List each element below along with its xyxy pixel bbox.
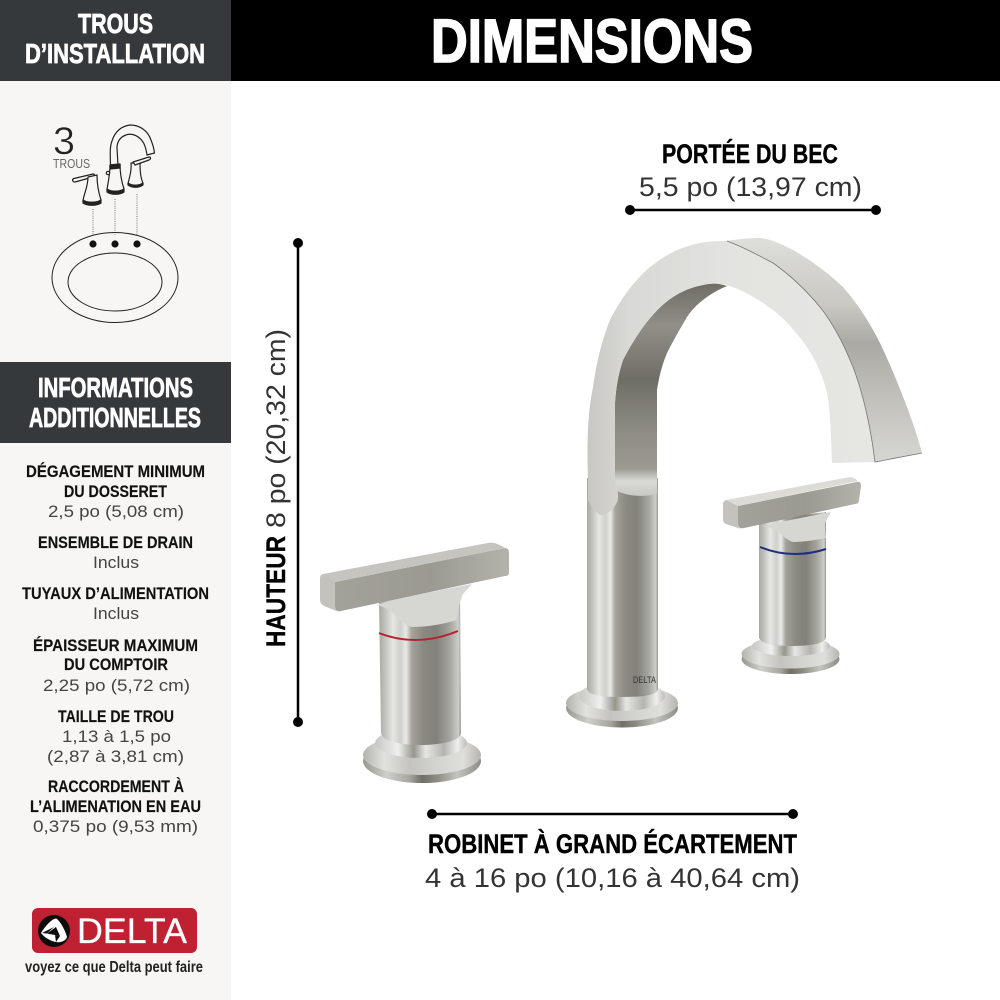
handle neck [377,584,472,627]
header: informations additionnelles: ADDITIONNELLES [29,402,201,433]
spec: dégagement minimum: DÉGAGEMENT MINIMUM [26,462,205,481]
spout inside [615,284,727,496]
dimension: height: HAUTEUR [261,536,291,647]
lever top highlight [323,543,505,582]
header: informations additionnelles [0,362,231,443]
spec: épaisseur maximum: 2,25 po (5,72 cm) [43,677,190,695]
label: 3 trous: 3 [53,120,75,163]
lever bar [738,482,861,528]
spout front face [588,241,875,515]
label: 3 trous [53,120,90,171]
handle stem [759,512,826,646]
spec: taille de trou: 1,13 à 1,5 po [62,728,171,746]
spec: raccordement [30,777,201,836]
spec: dégagement minimum: DU DOSSERET [64,483,167,501]
dimension: spout reach [625,138,881,215]
label: 3 trous: TROUS [53,157,90,171]
handle stem [379,590,461,745]
spec: épaisseur maximum [33,636,198,695]
spec: épaisseur maximum: ÉPAISSEUR MAXIMUM [33,636,198,655]
header: informations additionnelles: INFORMATIONS [38,372,193,403]
hole alignment dotted lines [93,194,137,235]
red indicator line [379,631,458,640]
spec: ensemble de drain [38,534,193,572]
lever end cap [320,574,339,612]
spec: taille de trou: (2,87 à 3,81 cm) [47,748,184,766]
header: dimensions [231,0,1000,81]
lever top highlight [726,477,858,506]
header: trous d'installation: TROUS [78,8,153,39]
spec: ensemble de drain: ENSEMBLE DE DRAIN [38,534,193,552]
icon: three-hole sink diagram [52,120,178,322]
handle base [742,636,840,674]
engraved delta mark: DELTA [633,675,657,686]
header: dimensions: DIMENSIONS [431,7,753,75]
faucet: right handle (cold) [723,477,861,674]
faucet: centre spout [566,238,922,728]
spout pillar [587,478,658,697]
spec: tuyaux d'alimentation [22,585,209,623]
sink basin [52,232,178,322]
spec: épaisseur maximum: DU COMPTOIR [64,656,168,674]
spec: taille de trou: TAILLE DE TROU [58,708,174,726]
spec: tuyaux d'alimentation: Inclus [93,605,139,623]
logo: delta: voyez ce que Delta peut faire [25,959,203,976]
logo: delta [25,908,203,976]
header: trous d'installation: D’INSTALLATION [25,38,205,69]
sidebar background [0,0,231,1000]
spec: raccordement: L’ALIMENATION EN EAU [30,798,201,816]
dimension: widespread [425,809,800,893]
dimension: height: 8 po (20,32 cm) [261,329,291,528]
spec: raccordement: 0,375 po (9,53 mm) [33,818,198,836]
dimension: widespread: ROBINET À GRAND ÉCARTEMENT [428,828,797,859]
dimension: height [261,238,303,727]
dimension: widespread: 4 à 16 po (10,16 à 40,64 cm) [425,863,800,893]
spout edge seam [727,241,922,462]
faucet: left handle (hot) [320,543,509,783]
header: trous d'installation [0,0,231,81]
logo: delta: DELTA [77,912,188,951]
spec: tuyaux d'alimentation: TUYAUX D’ALIMENTATION [22,585,209,603]
dimension: spout reach: 5,5 po (13,97 cm) [639,172,862,202]
icon: small faucet [73,125,154,205]
spec: taille de trou [47,708,184,766]
lever end cap [723,500,741,529]
handle base [363,728,481,783]
spec: ensemble de drain: Inclus [93,554,139,572]
spec: dégagement minimum: 2,5 po (5,08 cm) [48,503,184,521]
spec: dégagement minimum [26,462,205,521]
spec: raccordement: RACCORDEMENT À [48,777,184,796]
dimension: spout reach: PORTÉE DU BEC [662,138,838,169]
spout side face [727,238,922,462]
icon: delta mark [38,915,70,947]
lever bar [335,548,509,611]
spout pillar base [566,681,678,728]
sink holes [89,240,141,248]
blue indicator line [760,547,826,554]
handle neck [762,512,831,542]
